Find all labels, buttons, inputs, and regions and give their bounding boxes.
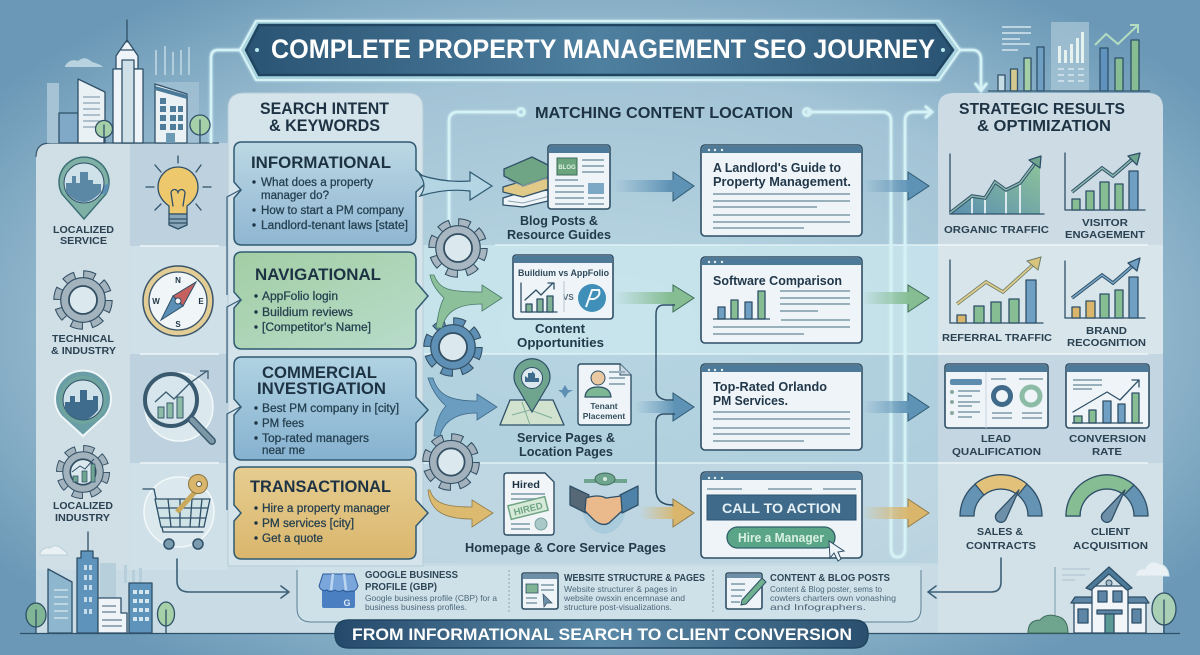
heading: strategic results: & OPTIMIZATION [977, 118, 1111, 135]
arrow: cart to bottom strip [177, 559, 289, 598]
card: software comparison: Software Comparison [713, 273, 842, 288]
card: landlord guide [701, 145, 862, 236]
panel: strategic results background [938, 93, 1163, 634]
label: blog posts: Blog Posts & [520, 214, 598, 228]
icon: storefront [319, 574, 358, 608]
illustration: bottom-left city [26, 532, 174, 633]
gauge: client acquisition: CLIENT [1091, 526, 1131, 538]
card: commercial investigation: PM fees [262, 418, 304, 430]
content: homepage and core pages [465, 473, 666, 555]
text: content and blog posts [770, 573, 896, 612]
arrow: transactional to homepage [428, 490, 493, 527]
gauge: client acquisition: ACQUISITION [1073, 540, 1148, 552]
card: transactional: Hire a property manager [262, 503, 390, 515]
button: hire a manager: Hire a Manager [738, 531, 824, 545]
arrow: commercial to service pages [428, 378, 497, 436]
panel: search intent and keywords [227, 93, 428, 566]
icon: hired document [504, 473, 554, 535]
row bands [423, 245, 938, 565]
section: google business profile [319, 570, 497, 612]
text: website structure: structure post-visualizations. [564, 602, 672, 612]
label: localized service: LOCALIZED [53, 224, 114, 236]
heading: matching content location: MATCHING CONTENT LOCATION [535, 105, 793, 122]
text: google business: PROFILE (GBP) [365, 582, 437, 593]
icon: document with pencil [726, 573, 766, 609]
card: transactional: Get a quote [262, 533, 323, 545]
label: content opportunities: Opportunities [517, 336, 604, 350]
content: comparison card [513, 255, 613, 350]
heading: search intent: SEARCH INTENT [260, 100, 389, 118]
connector: vertical content line [656, 305, 675, 505]
card: top-rated services: Top-Rated Orlando [713, 379, 827, 394]
icon: localized service pin [59, 157, 109, 219]
content: comparison card: Buildium vs AppFolio [518, 268, 609, 278]
chart: lead qualification dashboard [945, 364, 1048, 458]
gears between cards [427, 223, 483, 486]
text: content and blog posts: cowters charters own vonashing [770, 593, 896, 603]
text: content and blog posts: and Infographers. [770, 602, 866, 612]
icon: light bulb [146, 156, 211, 229]
panel: bottom strip [297, 566, 921, 622]
illustration: bottom-right house [1028, 562, 1176, 633]
gauge: sales and contracts [960, 475, 1042, 552]
icon: gear localized industry [60, 450, 106, 494]
label: content opportunities: Content [535, 322, 586, 336]
heading: strategic results [959, 101, 1125, 135]
text: google business [365, 570, 497, 612]
icon: books [503, 157, 552, 207]
footer text: FROM INFORMATIONAL SEARCH TO CLIENT CONVERSION [352, 625, 852, 644]
label: service pages: Service Pages & [517, 431, 615, 445]
icon: compass: N [175, 276, 181, 285]
label: localized industry [53, 500, 113, 524]
arrows: result cards to strategic results [862, 172, 929, 527]
label: technical and industry: & INDUSTRY [51, 345, 116, 357]
arrow: navigational to content [430, 275, 502, 328]
illustration: top-left skyline [47, 20, 210, 143]
title text: COMPLETE PROPERTY MANAGEMENT SEO JOURNEY [271, 34, 935, 64]
chart: conversion rate card: CONVERSION [1069, 433, 1146, 445]
card: informational: How to start a PM company [261, 205, 404, 217]
icon: hired document: Hired [512, 479, 540, 491]
chart: visitor engagement: VISITOR [1082, 217, 1128, 229]
chart: visitor engagement [1065, 153, 1146, 241]
icon: shopping cart with key [143, 474, 214, 549]
chart: conversion rate card [1066, 364, 1149, 458]
title banner [240, 21, 960, 80]
card: informational: What does a property [261, 177, 373, 189]
illustration: top-right data skyline [988, 22, 1150, 91]
heading: search intent: & KEYWORDS [269, 117, 380, 135]
chart: organic traffic: ORGANIC TRAFFIC [944, 224, 1049, 236]
icon: tenant placement document [578, 364, 631, 425]
label: localized service [53, 224, 114, 247]
label: homepage: Homepage & Core Service Pages [465, 541, 666, 555]
card: informational: INFORMATIONAL [251, 153, 391, 172]
card: transactional [234, 467, 428, 559]
label: technical and industry: TECHNICAL [52, 333, 115, 345]
card: navigational: AppFolio login [262, 291, 338, 303]
gauge: client acquisition [1066, 475, 1148, 552]
icon: tenant placement document: Placement [583, 411, 625, 421]
card: navigational: Buildium reviews [262, 307, 353, 319]
text: website structure: website owsxin encemnase and [563, 593, 685, 603]
icon: gear technical [58, 275, 108, 325]
icon: compass [143, 266, 213, 336]
heading: search intent [260, 100, 389, 135]
chart: referral traffic: REFERRAL TRAFFIC [942, 332, 1052, 344]
chart: brand recognition: BRAND [1086, 325, 1127, 337]
text: content and blog posts: Content & Blog poster, sems to [770, 584, 882, 594]
icon: storefront: G [343, 598, 351, 608]
chart: visitor engagement: ENGAGEMENT [1065, 229, 1146, 241]
label: technical and industry [51, 333, 116, 357]
card: top-rated services: PM Services. [713, 393, 788, 408]
label: localized service: SERVICE [60, 235, 107, 247]
card: call to action: CALL TO ACTION [722, 500, 841, 516]
label: blog posts [507, 214, 611, 242]
heading: strategic results: STRATEGIC RESULTS [959, 101, 1125, 118]
card: informational: manager do? [261, 190, 329, 202]
card: navigational [234, 252, 428, 349]
card: commercial investigation: INVESTIGATION [257, 380, 386, 398]
section: content and blog posts [713, 570, 896, 612]
text: google business: business business profiles. [365, 602, 467, 612]
label: localized industry: INDUSTRY [55, 512, 110, 524]
gauge: sales and contracts: SALES & [977, 526, 1023, 538]
footer banner [335, 620, 868, 648]
text: website structure: WEBSITE STRUCTURE & PAGES [564, 573, 705, 584]
text: website structure [563, 573, 705, 612]
text: website structure: Website structurer & pages in [564, 584, 677, 594]
label: content opportunities [517, 322, 604, 350]
glowing connectors [211, 50, 987, 557]
card: navigational: [Competitor's Name] [262, 322, 371, 334]
icon: website wireframe [522, 573, 558, 609]
text: content and blog posts: CONTENT & BLOG POSTS [770, 573, 890, 584]
card: commercial investigation: COMMERCIAL [262, 364, 377, 382]
icon: compass: W [152, 297, 160, 306]
left branch line [227, 190, 240, 510]
arrow: informational to blog [420, 172, 492, 200]
card: landlord guide: Property Management. [713, 174, 851, 189]
card: top-rated services [701, 364, 862, 450]
button: hire a manager [727, 527, 835, 548]
baseline [20, 632, 1180, 634]
label: blog posts: Resource Guides [507, 228, 611, 242]
card: call to action [701, 472, 862, 561]
card: transactional: TRANSACTIONAL [250, 477, 391, 496]
gauge: sales and contracts: CONTRACTS [966, 540, 1036, 552]
content: service and location pages [500, 359, 631, 459]
icon: localized pin [55, 371, 111, 436]
chart: brand recognition: RECOGNITION [1067, 337, 1146, 349]
card: commercial investigation: near me [262, 445, 305, 457]
icon: map and pin [500, 359, 564, 425]
text: google business: GOOGLE BUSINESS [365, 570, 458, 581]
icon: handshake and key [570, 473, 638, 534]
icon: compass: S [175, 320, 181, 329]
card: transactional: PM services [city] [262, 518, 354, 530]
text: google business: Google business profile (CBP) for a [365, 593, 497, 603]
icon: blog page: BLOG [558, 165, 576, 171]
panel: left icon columns [36, 143, 228, 570]
icon: magnifier chart [145, 371, 213, 441]
chart: lead qualification dashboard: LEAD [981, 433, 1011, 445]
card: software comparison [701, 257, 862, 343]
icon: hired document: HIRED [513, 501, 544, 518]
icon: compass: E [198, 297, 204, 306]
panel: lower light field [36, 563, 1163, 634]
chart: conversion rate card: RATE [1092, 446, 1122, 458]
label: localized industry: LOCALIZED [53, 500, 113, 512]
chart: organic traffic [944, 154, 1049, 236]
icon: tenant placement document: Tenant [590, 401, 618, 411]
content: blog posts and guides [503, 145, 611, 242]
arrows: content to result cards [613, 172, 694, 527]
card: navigational: NAVIGATIONAL [255, 266, 381, 284]
card: landlord guide: A Landlord's Guide to [713, 160, 841, 175]
card: commercial investigation: Best PM company in [city] [262, 403, 399, 415]
card: commercial investigation: Top-rated managers [262, 433, 369, 445]
label: service pages: Location Pages [519, 445, 613, 459]
arrow: results back to bottom strip [928, 558, 1001, 598]
card: informational [234, 142, 428, 245]
section: website structure [509, 570, 705, 612]
label: service pages [517, 431, 615, 459]
card: commercial investigation [234, 357, 428, 460]
card: informational: Landlord-tenant laws [state] [261, 220, 408, 232]
content: comparison card: VS [563, 293, 574, 302]
chart: lead qualification dashboard: QUALIFICATION [952, 446, 1041, 458]
chart: referral traffic [942, 257, 1052, 344]
chart: brand recognition [1065, 258, 1146, 349]
